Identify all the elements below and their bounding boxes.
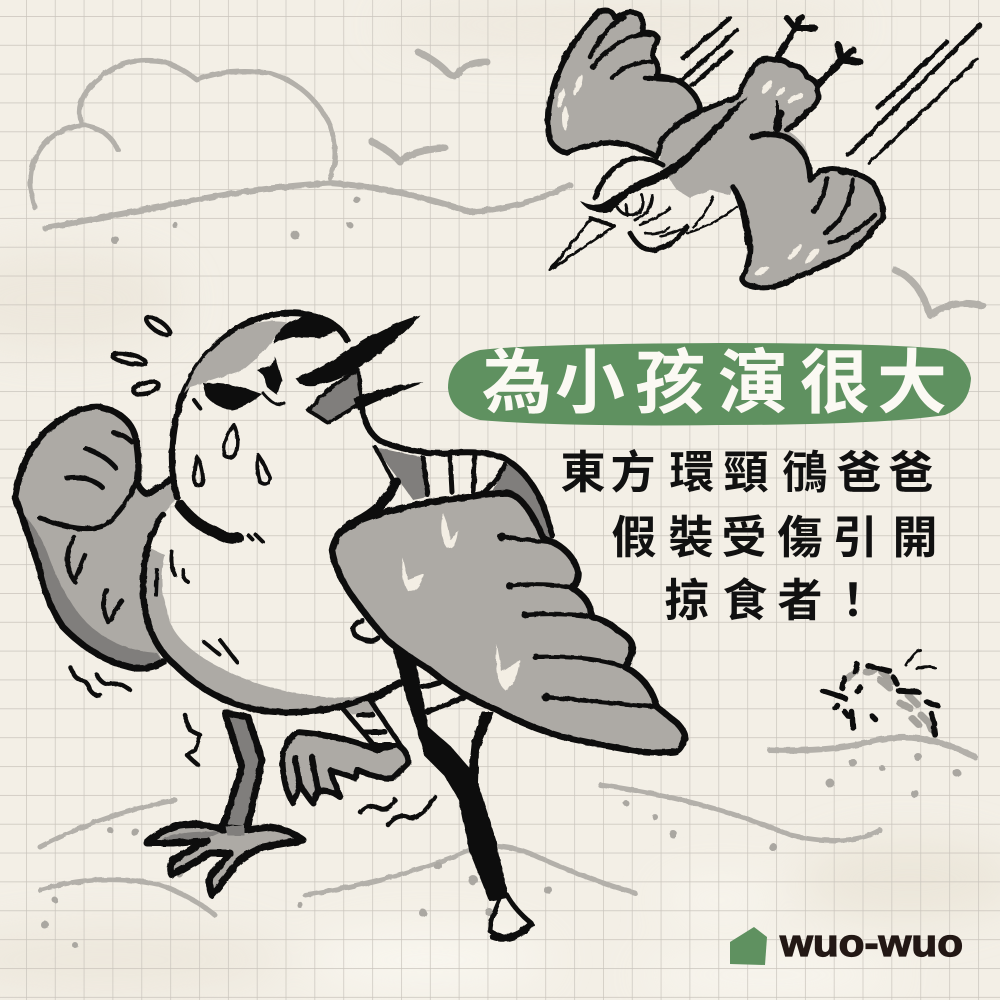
belly shading (145, 548, 372, 713)
eye mask (203, 383, 262, 410)
subtitle text: 環 (669, 447, 715, 498)
right wing (332, 493, 685, 753)
logo (730, 923, 963, 965)
eye (257, 357, 284, 404)
title banner: 小 (555, 344, 625, 422)
beak (295, 315, 423, 423)
subtitle text: 者 (777, 575, 823, 626)
body contour strokes (590, 18, 883, 288)
neck patch and collar (350, 408, 552, 540)
angry brow (580, 97, 748, 213)
scattered dots (41, 196, 961, 948)
highlights (556, 74, 821, 277)
subtitle text: 鴴 (782, 447, 828, 498)
logo house icon (730, 927, 767, 965)
subtitle text: 假 (611, 512, 657, 563)
black cap marking (273, 315, 336, 343)
subtitle text: 爸 (888, 447, 934, 498)
head and beak (550, 158, 747, 270)
subtitle text: 裝 (668, 512, 714, 563)
knee ring (354, 620, 378, 641)
subtitle text: 掠 (664, 575, 710, 626)
leg bands (373, 678, 470, 712)
gull three (895, 270, 983, 315)
feather ticks (156, 400, 263, 662)
raised foot (283, 698, 408, 803)
standing foot (147, 824, 303, 895)
leg stripes (338, 700, 407, 755)
lower foot (490, 895, 532, 939)
left wing (548, 10, 700, 157)
toes (295, 757, 318, 790)
standing leg (223, 713, 262, 830)
body outline (143, 313, 400, 712)
flying sweat marks (111, 314, 172, 397)
title banner: 大 (877, 344, 947, 422)
small chick (823, 650, 938, 735)
wing feather lines (502, 537, 657, 707)
subtitle text: 東 (560, 447, 606, 498)
hill line top (45, 183, 570, 228)
title banner: 孩 (635, 344, 705, 422)
speed lines (664, 18, 980, 163)
ground lines (40, 737, 975, 915)
subtitle text: 引 (832, 512, 878, 563)
head cap (184, 321, 287, 393)
subtitle text: 方 (610, 447, 656, 498)
legs and feet (775, 17, 860, 88)
subtitle text (560, 447, 938, 626)
title banner (448, 343, 971, 425)
subtitle text: 開 (892, 512, 938, 563)
logo wordmark: wuo-wuo (779, 923, 963, 965)
subtitle text: 受 (721, 512, 767, 563)
gull two (372, 142, 445, 162)
body and right wing (660, 59, 883, 288)
wing highlights (402, 513, 520, 690)
subtitle text: 頸 (723, 447, 769, 498)
title banner: 演 (718, 344, 788, 422)
title banner: 很 (800, 344, 870, 422)
gull one (418, 52, 487, 76)
sweat drops (194, 425, 270, 485)
subtitle text: 食 (722, 575, 768, 626)
diving predator bird (548, 10, 980, 288)
main plover bird (15, 313, 685, 939)
raised leg (354, 620, 532, 939)
subtitle text: 爸 (836, 447, 882, 498)
neck collar mark (180, 505, 238, 538)
cloud (30, 60, 335, 208)
title banner: 為 (482, 344, 552, 422)
subtitle text: ！ (830, 575, 876, 626)
raised leg top shading (338, 698, 378, 714)
left wing (15, 407, 178, 668)
eye (617, 195, 652, 220)
subtitle text: 傷 (777, 512, 823, 563)
shake squiggles (71, 668, 435, 825)
